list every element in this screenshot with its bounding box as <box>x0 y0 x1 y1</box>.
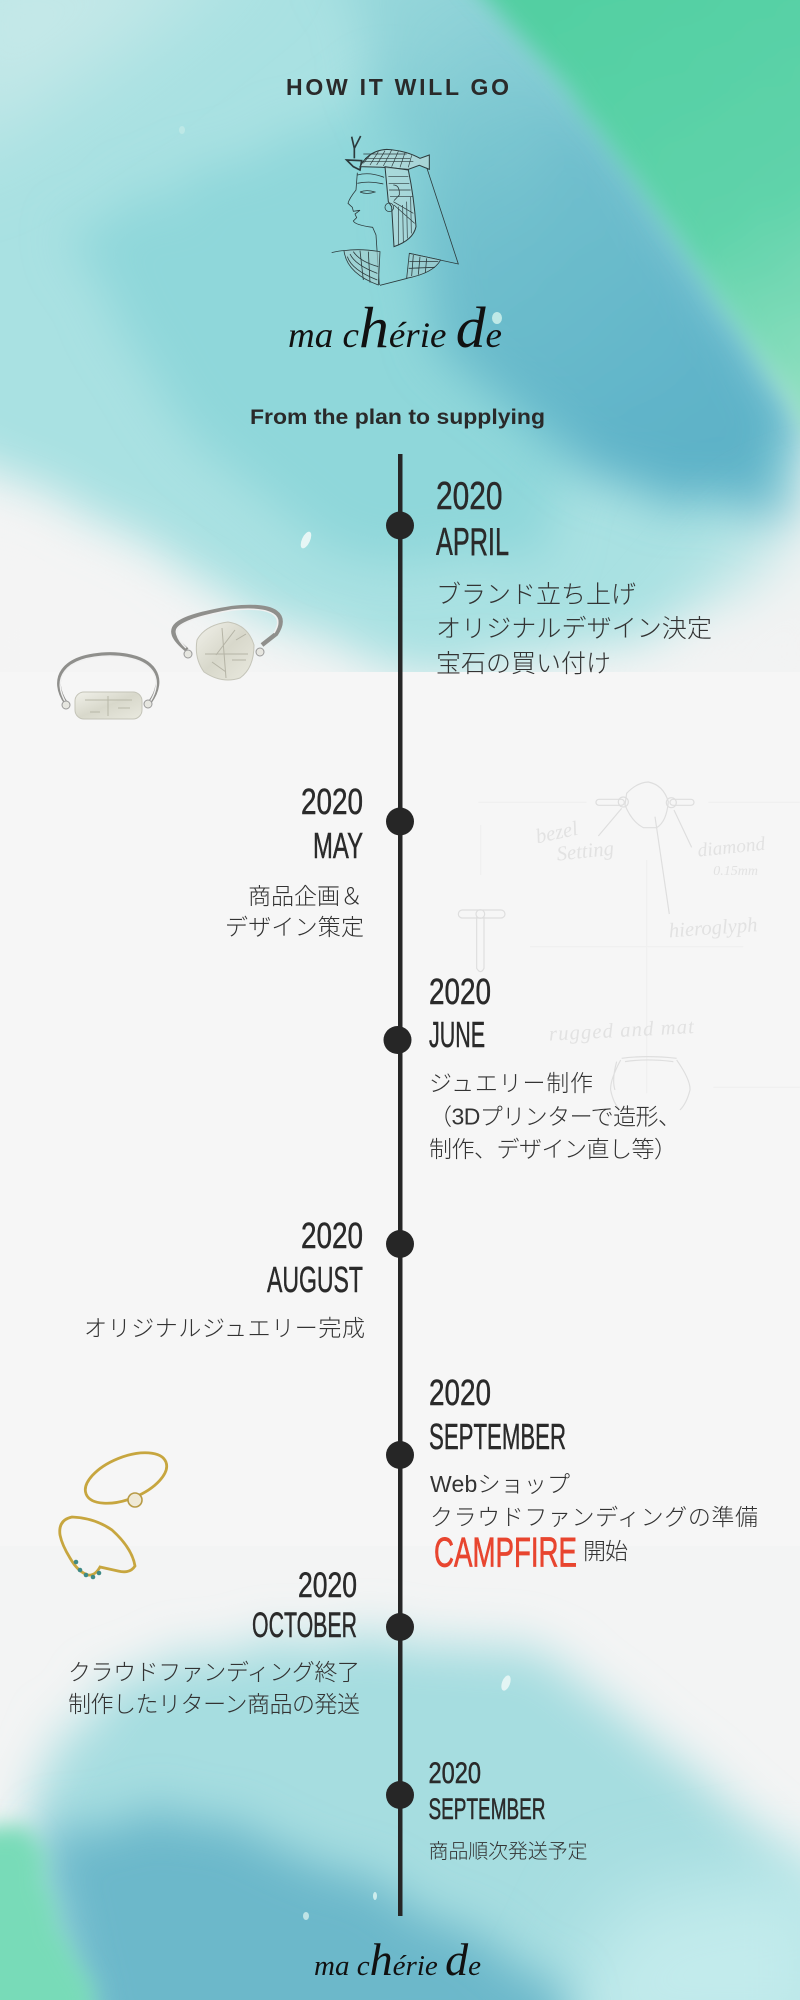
sketch labels: 0.15mm <box>713 864 758 879</box>
sketch labels: diamond <box>697 834 766 862</box>
timeline node: October 2020: OCTOBER <box>252 1606 357 1645</box>
timeline node: October 2020: クラウドファンディング終了 <box>68 1659 360 1685</box>
timeline node: June 2020: 制作、デザイン直し等） <box>429 1136 677 1162</box>
timeline node: April 2020: 2020 <box>436 475 502 518</box>
timeline node: May 2020 <box>225 781 414 940</box>
brand name: CAMPFIRE: CAMPFIRE <box>434 1528 577 1576</box>
timeline node: August 2020: AUGUST <box>267 1259 363 1300</box>
sketch labels: rugged and mat <box>548 1016 696 1046</box>
timeline node: August 2020: オリジナルジュエリー完成 <box>84 1315 365 1341</box>
timeline node: September 2020 shipping: 商品順次発送予定 <box>428 1840 588 1863</box>
panel: top watercolor background <box>0 0 800 672</box>
sketch labels: hieroglyph <box>668 914 758 942</box>
timeline node: September 2020: クラウドファンディングの準備 <box>430 1504 758 1530</box>
timeline node: April 2020: ブランド立ち上げ <box>436 581 636 609</box>
logo: ma chérie de: ma chérie de <box>288 295 502 360</box>
timeline node: May 2020: 商品企画＆ <box>248 883 363 909</box>
panel: bottom watercolor background <box>0 1602 800 2000</box>
timeline node: June 2020: 2020 <box>429 971 491 1012</box>
timeline node: October 2020: 制作したリターン商品の発送 <box>68 1691 360 1717</box>
sketch labels <box>534 818 766 1046</box>
timeline node: June 2020: ジュエリー制作 <box>429 1070 593 1096</box>
timeline node: June 2020: （3Dプリンターで造形、 <box>429 1104 681 1130</box>
timeline node: September 2020: 2020 <box>429 1372 491 1413</box>
timeline node: April 2020: 宝石の買い付け <box>436 650 611 678</box>
timeline node: August 2020: 2020 <box>301 1215 363 1256</box>
timeline node: October 2020 <box>68 1566 414 1717</box>
illustration: faint jewellery sketch <box>458 782 800 1110</box>
timeline node: September 2020 shipping <box>386 1757 588 1863</box>
icon: gold solitaire ring <box>78 1442 174 1514</box>
timeline node: April 2020: オリジナルデザイン決定 <box>436 615 712 643</box>
timeline node: September 2020: 開始 <box>583 1538 628 1564</box>
title: HOW IT WILL GO <box>286 74 509 100</box>
timeline node: September 2020 shipping: SEPTEMBER <box>428 1793 546 1826</box>
timeline node: October 2020: 2020 <box>298 1566 357 1605</box>
timeline node: September 2020 <box>386 1372 758 1576</box>
icon: silver ring with plate <box>59 654 157 719</box>
timeline node: May 2020: MAY <box>313 825 363 866</box>
timeline node: June 2020 <box>384 971 681 1162</box>
timeline node: April 2020 <box>386 475 712 678</box>
photo: silver rings <box>59 607 281 719</box>
icon: silver ring with coin <box>173 607 281 680</box>
timeline node: September 2020 shipping: 2020 <box>428 1757 481 1790</box>
timeline node: May 2020: 2020 <box>301 781 363 822</box>
subtitle: From the plan to supplying <box>250 406 545 429</box>
icon: gold curved ring with stones <box>60 1517 135 1579</box>
sketch labels: Setting <box>556 838 615 866</box>
timeline node: June 2020: JUNE <box>429 1014 485 1055</box>
timeline node: August 2020 <box>84 1215 414 1341</box>
timeline node: September 2020: SEPTEMBER <box>429 1416 566 1457</box>
timeline node: May 2020: デザイン策定 <box>225 914 364 940</box>
footer logo: ma chérie de: ma chérie de <box>314 1934 481 1985</box>
timeline node: April 2020: APRIL <box>436 521 509 564</box>
sketch labels: bezel <box>534 818 580 848</box>
icon: Egyptian queen logo <box>332 136 458 285</box>
timeline line <box>398 454 402 1916</box>
timeline node: September 2020: Webショップ <box>430 1471 570 1497</box>
photo: gold rings <box>60 1442 174 1579</box>
